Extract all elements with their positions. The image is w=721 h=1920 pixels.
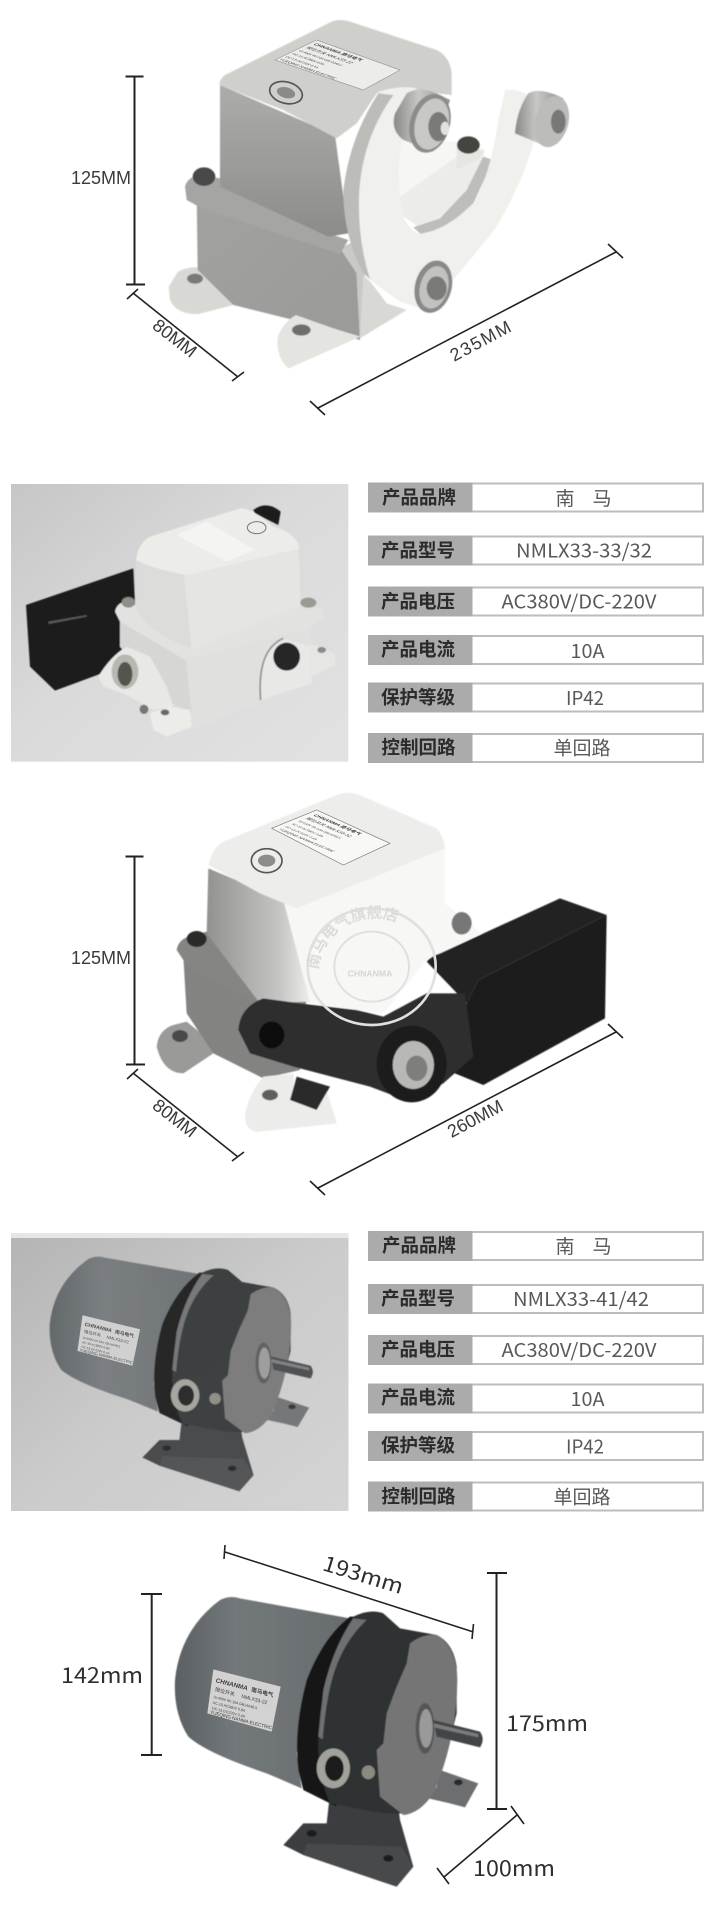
- row: current: 10A: [570, 1385, 605, 1412]
- row: protection: IP42: [566, 1432, 604, 1460]
- row: protection: 保护等级: [381, 687, 455, 708]
- nameplate text: 南马电气: [251, 1685, 274, 1699]
- row: brand: 南 马: [555, 484, 612, 511]
- row: model: [368, 536, 703, 566]
- nameplate text: NMLX33-22: [241, 1694, 268, 1706]
- row: brand: 产品品牌: [382, 1235, 456, 1256]
- row: voltage: [368, 586, 703, 616]
- row: protection: [368, 682, 703, 712]
- dimension: height 175mm: 175mm: [506, 1708, 588, 1738]
- dimension: length 260MM: 260MM: [444, 1096, 506, 1142]
- row: current: 10A: [570, 637, 605, 664]
- watermark stamp: [306, 905, 437, 1026]
- dimension: length 235MM: [310, 244, 623, 415]
- product photo: cylinder limit switch: [175, 1597, 483, 1887]
- dimension: length 260MM: [310, 1024, 623, 1195]
- row: current: [368, 1384, 703, 1414]
- row: brand: 南 马: [555, 1232, 612, 1259]
- dimension: height 125MM: 125MM: [71, 948, 131, 968]
- row: model: 产品型号: [381, 540, 455, 561]
- product photo: white roller lever switch: [169, 20, 574, 368]
- nameplate text: DC-13 DC220V 0.4A: [284, 56, 320, 69]
- dimension: width 193mm: 193mm: [319, 1548, 407, 1601]
- row: brand: 产品品牌: [382, 487, 456, 508]
- dimension: depth 80MM: [127, 289, 244, 381]
- row: protection: IP42: [566, 684, 604, 711]
- nameplate text: 限位开关 NMLX33-32: [303, 817, 354, 838]
- product photo: black counterweight switch: [156, 793, 608, 1132]
- nameplate text: Ui:400V Ith:10A GB14048.5: [297, 50, 343, 66]
- panel: cylinder switch with dimensions: [61, 1545, 588, 1887]
- panel: photo of weighted lever switch: [11, 484, 348, 762]
- row: voltage: [368, 1335, 703, 1365]
- dimension: height 175mm: [487, 1573, 588, 1809]
- nameplate text: CHNANMA: [215, 1677, 248, 1692]
- dimension: length 235MM: 235MM: [447, 316, 516, 365]
- nameplate text: DC-13 DC220V 0.4A: [283, 826, 319, 841]
- row: model: [368, 1284, 703, 1314]
- dimension: height 142mm: 142mm: [61, 1660, 143, 1690]
- nameplate text: CHNANMA 南马电气: [311, 813, 365, 836]
- nameplate text: YUEQING NANMA ELECTRIC: [278, 58, 338, 80]
- row: control circuit: 控制回路: [381, 1486, 456, 1507]
- dimension: depth 100mm: 100mm: [473, 1853, 555, 1883]
- nameplate text: AC-15 AC380V 0.8A: [290, 823, 325, 838]
- row: model: NMLX33-41/42: [513, 1285, 649, 1312]
- row: model: 产品型号: [381, 1288, 455, 1309]
- row: control circuit: [368, 733, 703, 763]
- row: current: 产品电流: [381, 639, 455, 660]
- row: control circuit: 单回路: [553, 734, 611, 760]
- nameplate text: DC-13 DC220V 0.4A: [212, 1706, 246, 1719]
- nameplate text: AC-15 AC380V 0.8A: [213, 1701, 246, 1713]
- watermark stamp: 南马电气旗舰店: [306, 905, 400, 969]
- dimension: height 125MM: [71, 856, 145, 1065]
- dimension: depth 80MM: 80MM: [149, 1095, 201, 1142]
- nameplate text: Ui:400V Ith:10A GB14048.5: [297, 820, 342, 839]
- dimension: height 142mm: [61, 1594, 162, 1755]
- panel: weighted lever switch with dimensions: [71, 793, 624, 1196]
- dimension: height 125MM: [71, 76, 145, 285]
- nameplate text: YUEQING NANMA ELECTRIC: [277, 828, 336, 853]
- row: current: [368, 635, 703, 665]
- panel: spec table for NMLX33-41/42: [368, 1231, 703, 1512]
- nameplate text: [278, 42, 374, 80]
- nameplate text: AC-15 AC380V 0.8A: [291, 53, 326, 66]
- row: voltage: AC380V/DC-220V: [502, 588, 657, 614]
- row: control circuit: 控制回路: [381, 737, 456, 758]
- nameplate text: [277, 813, 373, 853]
- nameplate text: 限位开关: [215, 1686, 235, 1698]
- row: control circuit: [368, 1482, 703, 1512]
- row: protection: [368, 1431, 703, 1461]
- row: voltage: 产品电压: [381, 1339, 455, 1360]
- dimension: depth 100mm: [437, 1806, 555, 1884]
- nameplate text: CHNANMA 南马电气: [311, 42, 366, 62]
- row: model: NMLX33-33/32: [516, 536, 652, 564]
- nameplate text: 限位开关 NMLX33-22: [304, 46, 355, 65]
- row: brand: [368, 482, 703, 512]
- nameplate text: YUEQING NANMA ELECTRIC: [210, 1710, 273, 1731]
- panel: photo of cylinder switch: [11, 1233, 348, 1511]
- row: protection: 保护等级: [381, 1435, 455, 1456]
- watermark stamp: CHNANMA: [348, 969, 393, 979]
- nameplate text: Ui:400V Ith:10A GB14048.5: [213, 1695, 257, 1710]
- nameplate text: [210, 1676, 277, 1731]
- row: brand: [368, 1231, 703, 1261]
- row: voltage: AC380V/DC-220V: [502, 1336, 657, 1363]
- dimension: height 125MM: 125MM: [71, 168, 131, 188]
- dimension: depth 80MM: 80MM: [149, 315, 201, 362]
- row: current: 产品电流: [381, 1387, 455, 1408]
- dimension: depth 80MM: [127, 1069, 244, 1161]
- panel: white roller-lever switch with dimensions: [71, 20, 623, 415]
- row: voltage: 产品电压: [381, 591, 455, 612]
- row: control circuit: 单回路: [553, 1482, 611, 1510]
- panel: spec table for NMLX33-33/32: [368, 482, 703, 763]
- dimension: width 193mm: [224, 1545, 474, 1639]
